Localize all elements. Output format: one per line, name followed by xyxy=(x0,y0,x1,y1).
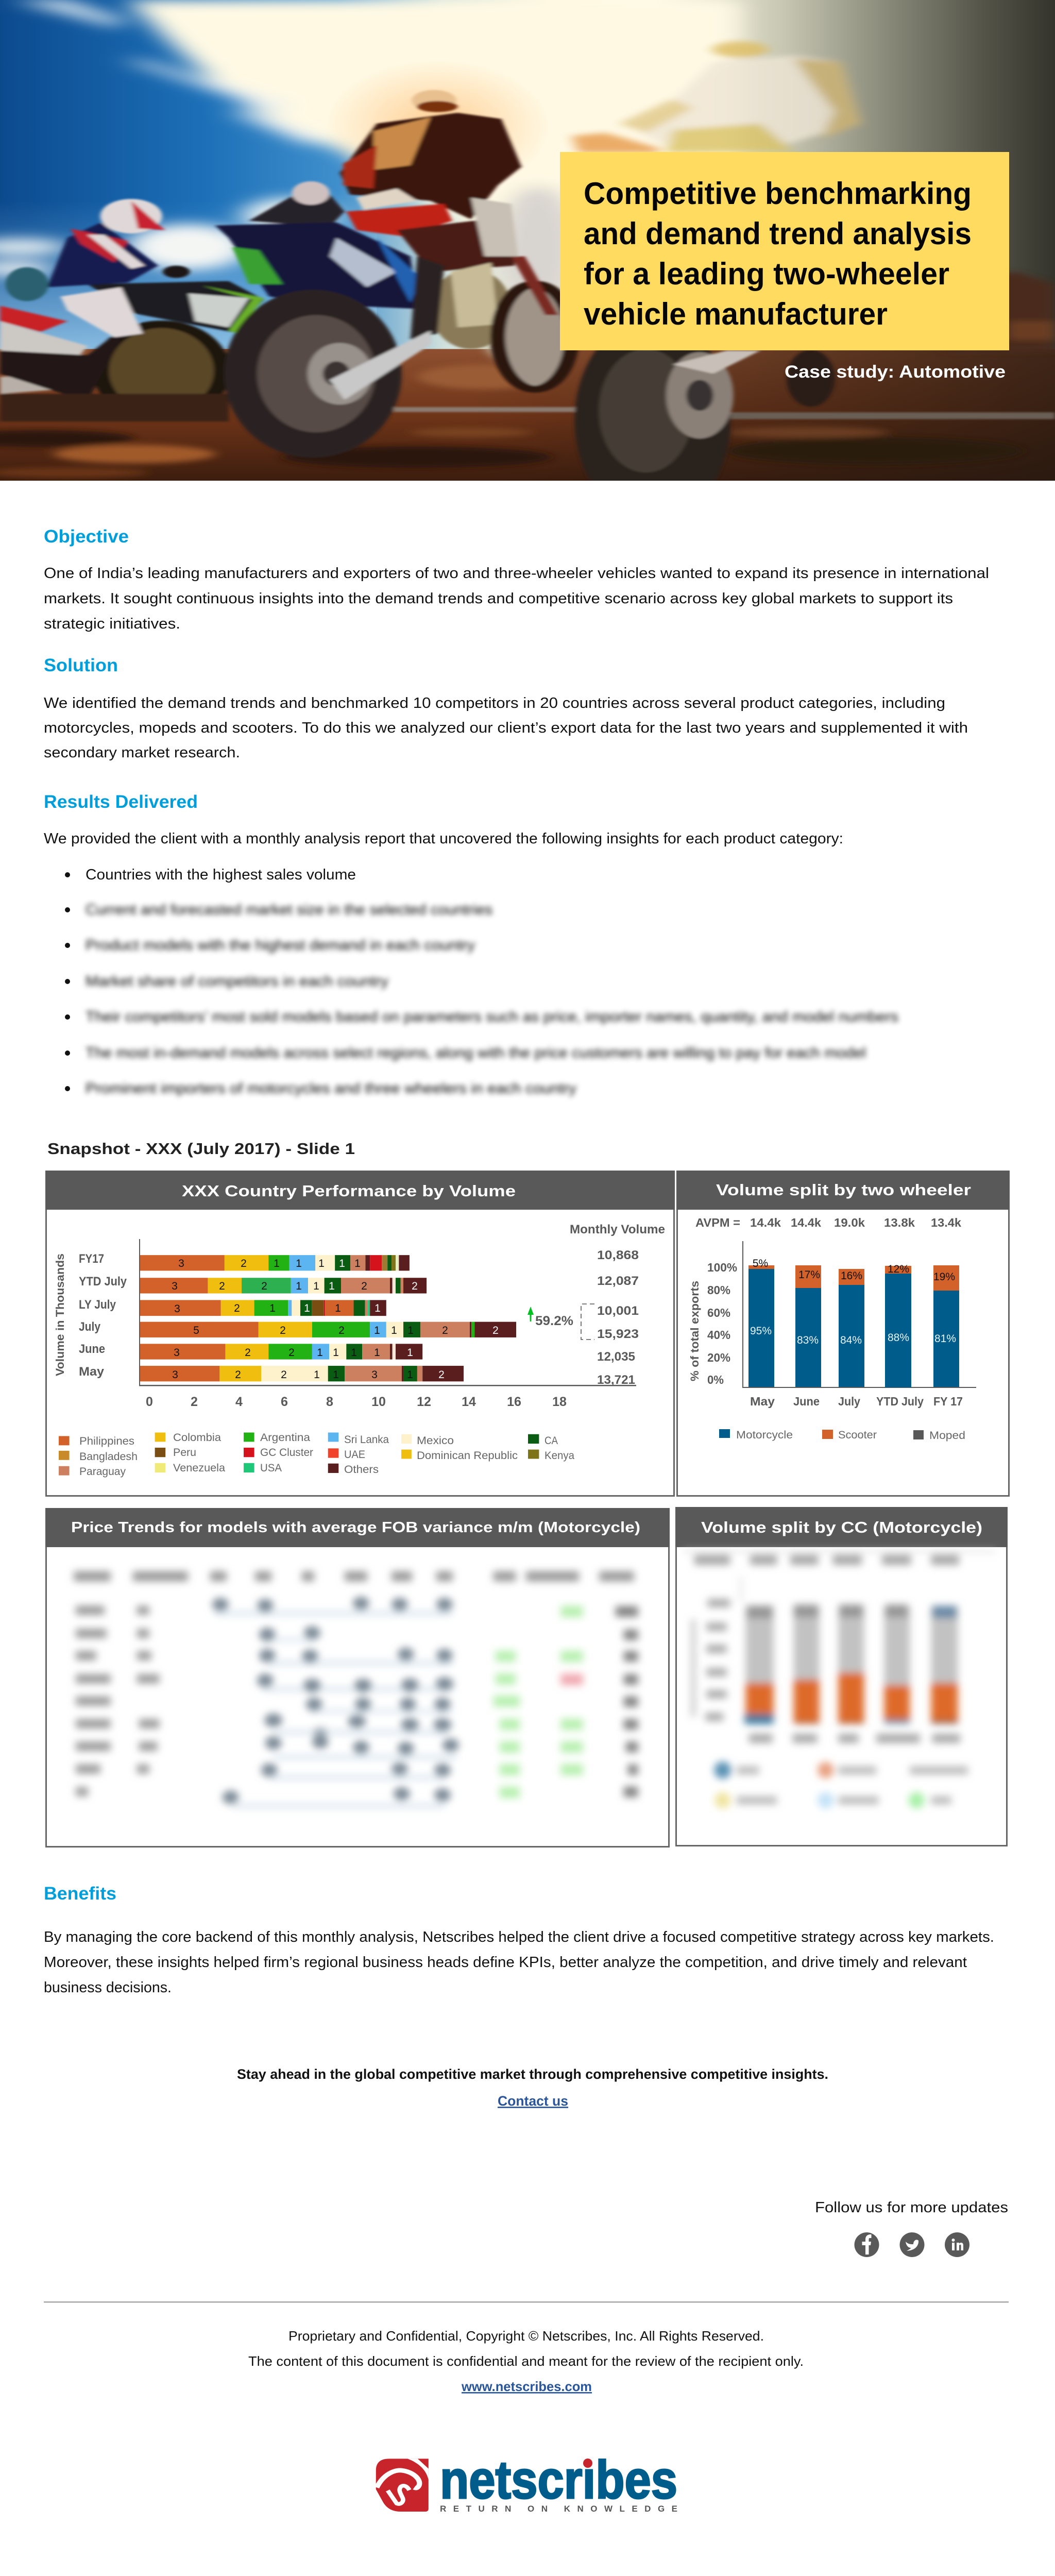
stacked bar chart: 3 xyxy=(172,1280,178,1292)
y axis labels: 20% xyxy=(707,1351,730,1364)
x axis labels: YTD July xyxy=(876,1395,924,1408)
icon: linkedin xyxy=(945,2232,969,2257)
blurred column chart xyxy=(683,1550,996,1808)
monthly volume column: 15,923 xyxy=(597,1327,639,1341)
stacked bar chart: 1 xyxy=(407,1369,413,1381)
legend: UAE xyxy=(344,1449,365,1461)
stacked bar chart: 2 xyxy=(361,1280,367,1292)
right wheel xyxy=(787,350,835,407)
stacked bar chart: 2 xyxy=(261,1280,267,1292)
x axis labels: June xyxy=(793,1395,820,1408)
legend xyxy=(719,1429,965,1442)
legend: GC Cluster xyxy=(260,1447,313,1459)
panel heading: Volume split by two wheeler xyxy=(716,1181,971,1199)
heading: snapshot: Snapshot - XXX (July 2017) - Slide 1 xyxy=(47,1140,355,1158)
bullet list: Market share of competitors in each country xyxy=(86,973,389,990)
logo wordmark: netscribes xyxy=(440,2450,677,2510)
stacked column chart: 17% xyxy=(798,1269,820,1281)
x axis labels: 14 xyxy=(462,1395,476,1409)
category labels: July xyxy=(79,1320,101,1334)
x axis labels: 8 xyxy=(326,1395,333,1409)
main rider xyxy=(340,113,521,219)
tank xyxy=(215,223,418,309)
y axis labels: 60% xyxy=(707,1306,730,1319)
y axis labels: 40% xyxy=(707,1328,730,1342)
legend: USA xyxy=(260,1462,282,1474)
stacked column chart: 19% xyxy=(933,1271,955,1283)
heading: solution: Solution xyxy=(44,655,118,675)
x axis labels xyxy=(750,1395,963,1408)
case study label: Case study: Automotive xyxy=(785,362,1006,382)
callout: growth 59.2% xyxy=(528,1304,594,1340)
title box: and demand trend analysis xyxy=(584,216,972,251)
x axis labels: 12 xyxy=(417,1395,431,1409)
legend: Philippines xyxy=(79,1435,134,1447)
bullet list: The most in-demand models across select regions, along with the price customers are willing to pay for each model xyxy=(86,1045,866,1061)
text: results intro: We provided the client with a monthly analysis report that uncovered the following insights for each product category: xyxy=(44,831,843,847)
logo xyxy=(376,2450,677,2514)
panel heading: XXX Country Performance by Volume xyxy=(182,1182,516,1200)
legend: Dominican Republic xyxy=(417,1450,518,1462)
legend: CA xyxy=(544,1435,558,1447)
stacked bar chart: 1 xyxy=(374,1325,380,1336)
contact link: Contact us xyxy=(498,2093,568,2109)
monthly volume column: 13,721 xyxy=(597,1373,635,1387)
stacked bar chart: 1 xyxy=(354,1258,361,1269)
legend: Colombia xyxy=(173,1432,221,1444)
monthly volume column xyxy=(570,1223,665,1387)
icon: twitter xyxy=(899,2232,924,2257)
stacked bar chart: 1 xyxy=(313,1280,319,1292)
legend: Sri Lanka xyxy=(344,1434,389,1446)
stacked column chart: 83% xyxy=(797,1334,819,1346)
y axis labels: 100% xyxy=(707,1261,737,1274)
website link: www.netscribes.com xyxy=(461,2379,592,2394)
stacked column chart: 81% xyxy=(934,1333,956,1345)
stacked bar chart: 1 xyxy=(375,1302,381,1314)
logo icon xyxy=(376,2459,429,2512)
title box: vehicle manufacturer xyxy=(584,297,888,331)
y axis labels: 0% xyxy=(707,1373,724,1386)
big rear wheel xyxy=(224,290,402,457)
text: solution: secondary market research. xyxy=(44,744,240,761)
stacked bar chart: 2 xyxy=(234,1302,240,1314)
stacked bar chart: 2 xyxy=(241,1258,247,1269)
panel heading: Volume split by CC (Motorcycle) xyxy=(701,1518,982,1536)
stacked bar chart: 2 xyxy=(288,1347,295,1359)
legend: Motorcycle xyxy=(736,1429,793,1441)
heading: results delivered: Results Delivered xyxy=(44,792,198,812)
stacked column chart xyxy=(742,1241,976,1388)
stacked bar chart: 1 xyxy=(351,1347,357,1359)
legend: Others xyxy=(344,1464,379,1476)
stacked bar chart: 1 xyxy=(304,1302,310,1314)
x axis labels: 18 xyxy=(552,1395,567,1409)
stacked column chart: 88% xyxy=(888,1332,909,1344)
monthly volume column: Monthly Volume xyxy=(570,1223,665,1236)
avpm row xyxy=(695,1216,961,1229)
stacked bar chart: 2 xyxy=(412,1280,418,1292)
ghost rider xyxy=(572,41,861,153)
stacked bar chart: 2 xyxy=(281,1369,287,1381)
text: benefits: By managing the core backend of this monthly analysis, Netscribes helped the client drive a focused competitive strategy across key markets. xyxy=(44,1929,994,1945)
avpm row: 13.8k xyxy=(884,1216,915,1229)
panel: volume split by two wheeler xyxy=(676,1171,1010,1496)
x axis labels: 4 xyxy=(235,1395,243,1409)
call to action: Stay ahead in the global competitive market through comprehensive competitive insights. xyxy=(237,2066,828,2082)
stacked bar chart: 1 xyxy=(333,1347,339,1359)
text: benefits: business decisions. xyxy=(44,1979,172,1996)
stacked bar chart: 2 xyxy=(338,1325,345,1336)
category labels xyxy=(79,1252,127,1379)
axis label: volume in thousands: Volume in Thousands xyxy=(54,1253,66,1376)
stacked bar chart: 3 xyxy=(178,1258,184,1269)
text: solution xyxy=(44,695,968,761)
icon: facebook xyxy=(854,2232,879,2257)
y axis labels xyxy=(688,1261,737,1386)
x axis labels: 16 xyxy=(507,1395,521,1409)
footer text: Proprietary and Confidential, Copyright © Netscribes, Inc. All Rights Reserved. xyxy=(288,2328,764,2344)
avpm row: AVPM = xyxy=(695,1216,740,1229)
avpm row: 14.4k xyxy=(791,1216,821,1229)
stacked column chart: 5% xyxy=(753,1258,768,1269)
stacked bar chart: 2 xyxy=(438,1369,445,1381)
stacked bar chart: 1 xyxy=(318,1258,325,1269)
left rider xyxy=(47,223,158,287)
stacked bar chart: 1 xyxy=(339,1258,345,1269)
bullet list: Prominent importers of motorcycles and three wheelers in each country xyxy=(86,1080,577,1097)
stacked bar chart: 1 xyxy=(329,1280,335,1292)
x axis labels: May xyxy=(750,1395,775,1408)
panel: volume split by cc xyxy=(675,1507,1008,1845)
stacked bar chart: 1 xyxy=(269,1302,276,1314)
category labels: LY July xyxy=(79,1298,116,1312)
blurred table xyxy=(74,1571,638,1809)
text: objective: strategic initiatives. xyxy=(44,616,180,632)
y axis labels: 80% xyxy=(707,1283,730,1297)
legend: Venezuela xyxy=(173,1462,225,1474)
stacked bar chart: 2 xyxy=(235,1369,241,1381)
category labels: June xyxy=(79,1342,105,1356)
stacked column chart: 12% xyxy=(888,1263,909,1275)
legend: Moped xyxy=(929,1430,965,1442)
monthly volume column: 12,087 xyxy=(597,1274,639,1288)
title box: Competitive benchmarking xyxy=(584,176,972,211)
panel: country performance by volume xyxy=(45,1171,675,1496)
category labels: May xyxy=(79,1365,105,1379)
stacked bar chart: 1 xyxy=(317,1347,323,1359)
stacked bar chart: 2 xyxy=(492,1325,499,1336)
legend: Argentina xyxy=(260,1432,310,1444)
stacked bar chart: 1 xyxy=(407,1325,414,1336)
avpm row: 14.4k xyxy=(750,1216,781,1229)
legend: Bangladesh xyxy=(79,1451,138,1463)
category labels: FY17 xyxy=(79,1252,104,1266)
x axis labels: 10 xyxy=(371,1395,386,1409)
heading: objective: Objective xyxy=(44,527,129,547)
stacked bar chart: 1 xyxy=(296,1280,302,1292)
bullet list: Their competitors’ most sold models based on parameters such as price, importer names, quantity, and model numbers xyxy=(86,1009,898,1025)
title box: for a leading two-wheeler xyxy=(584,257,949,291)
y axis labels: % of total exports xyxy=(688,1281,701,1381)
x axis labels: FY 17 xyxy=(933,1395,963,1408)
stacked bar chart: 1 xyxy=(407,1347,413,1359)
hero photo: motocross riders xyxy=(0,0,1055,522)
stacked bar chart: 5 xyxy=(193,1325,199,1336)
monthly volume column: 10,868 xyxy=(597,1248,639,1262)
x axis labels xyxy=(146,1395,567,1409)
stacked bar chart xyxy=(139,1239,636,1386)
title box xyxy=(560,152,1009,350)
bullet list: Product models with the highest demand in each country xyxy=(86,937,475,954)
text: solution: We identified the demand trends and benchmarked 10 competitors in 20 countries across several product categories, including xyxy=(44,695,945,711)
stacked column chart: 95% xyxy=(750,1325,772,1337)
bullet list: Countries with the highest sales volume xyxy=(86,867,356,883)
stacked bar chart: 2 xyxy=(280,1325,286,1336)
x axis labels: July xyxy=(838,1395,860,1408)
second rider helmet xyxy=(249,182,345,227)
legend: Peru xyxy=(173,1447,196,1459)
stacked bar chart: 1 xyxy=(274,1258,280,1269)
stacked bar chart: 1 xyxy=(374,1347,380,1359)
stacked bar chart: 1 xyxy=(335,1302,341,1314)
stacked column chart: 16% xyxy=(841,1270,862,1282)
legend xyxy=(59,1432,574,1478)
follow us label: Follow us for more updates xyxy=(815,2199,1008,2216)
text: objective: One of India’s leading manufacturers and exporters of two and three-wheeler vehicles wanted to expand its presence in international xyxy=(44,565,989,582)
legend: Mexico xyxy=(417,1435,454,1447)
avpm row: 13.4k xyxy=(931,1216,961,1229)
stacked bar chart: 1 xyxy=(296,1258,302,1269)
engine xyxy=(431,269,512,349)
text: objective: markets. It sought continuous insights into the demand trends and competitive scenario across key global markets to support its xyxy=(44,590,953,607)
text: solution: motorcycles, mopeds and scooters. To do this we analyzed our client’s export data for the last two years and supplemented it with xyxy=(44,720,968,736)
legend: Kenya xyxy=(544,1450,574,1462)
stacked bar chart: 3 xyxy=(174,1347,180,1359)
monthly volume column: 12,035 xyxy=(597,1350,635,1364)
footer text: The content of this document is confidential and meant for the review of the recipient only. xyxy=(248,2353,804,2369)
bullet list xyxy=(65,867,898,1097)
legend: Scooter xyxy=(838,1429,877,1441)
stacked column chart: 84% xyxy=(840,1334,862,1346)
stacked bar chart: 2 xyxy=(442,1325,448,1336)
text: benefits: Moreover, these insights helped firm’s regional business heads define KPIs, better analyze the competition, and drive timely and relevant xyxy=(44,1954,967,1971)
stacked bar chart: 2 xyxy=(219,1280,225,1292)
logo tagline: RETURN ON KNOWLEDGE xyxy=(440,2504,677,2514)
stacked bar chart: 1 xyxy=(333,1369,339,1381)
stacked bar chart: 3 xyxy=(174,1303,180,1315)
left bike xyxy=(101,324,222,417)
bullet list: Current and forecasted market size in the selected countries xyxy=(86,902,492,918)
avpm row: 19.0k xyxy=(834,1216,865,1229)
stacked bar chart: 1 xyxy=(314,1369,320,1381)
x axis labels: 0 xyxy=(146,1395,153,1409)
footer text xyxy=(248,2328,804,2369)
stacked bar chart: 3 xyxy=(172,1369,178,1381)
panel: price trends xyxy=(45,1508,670,1846)
x axis labels: 2 xyxy=(191,1395,198,1409)
heading: benefits: Benefits xyxy=(44,1884,116,1904)
callout: growth 59.2%: 59.2% xyxy=(535,1314,573,1328)
text: benefits xyxy=(44,1929,994,1996)
stacked bar chart: 2 xyxy=(245,1347,251,1359)
category labels: YTD July xyxy=(79,1275,127,1289)
x axis labels: 6 xyxy=(281,1395,288,1409)
text: objective xyxy=(44,565,989,632)
panel heading: Price Trends for models with average FOB variance m/m (Motorcycle) xyxy=(71,1519,640,1536)
monthly volume column: 10,001 xyxy=(597,1304,639,1318)
legend: Paraguay xyxy=(79,1466,126,1478)
stacked bar chart: 3 xyxy=(371,1369,378,1381)
stacked bar chart: 1 xyxy=(391,1325,397,1336)
